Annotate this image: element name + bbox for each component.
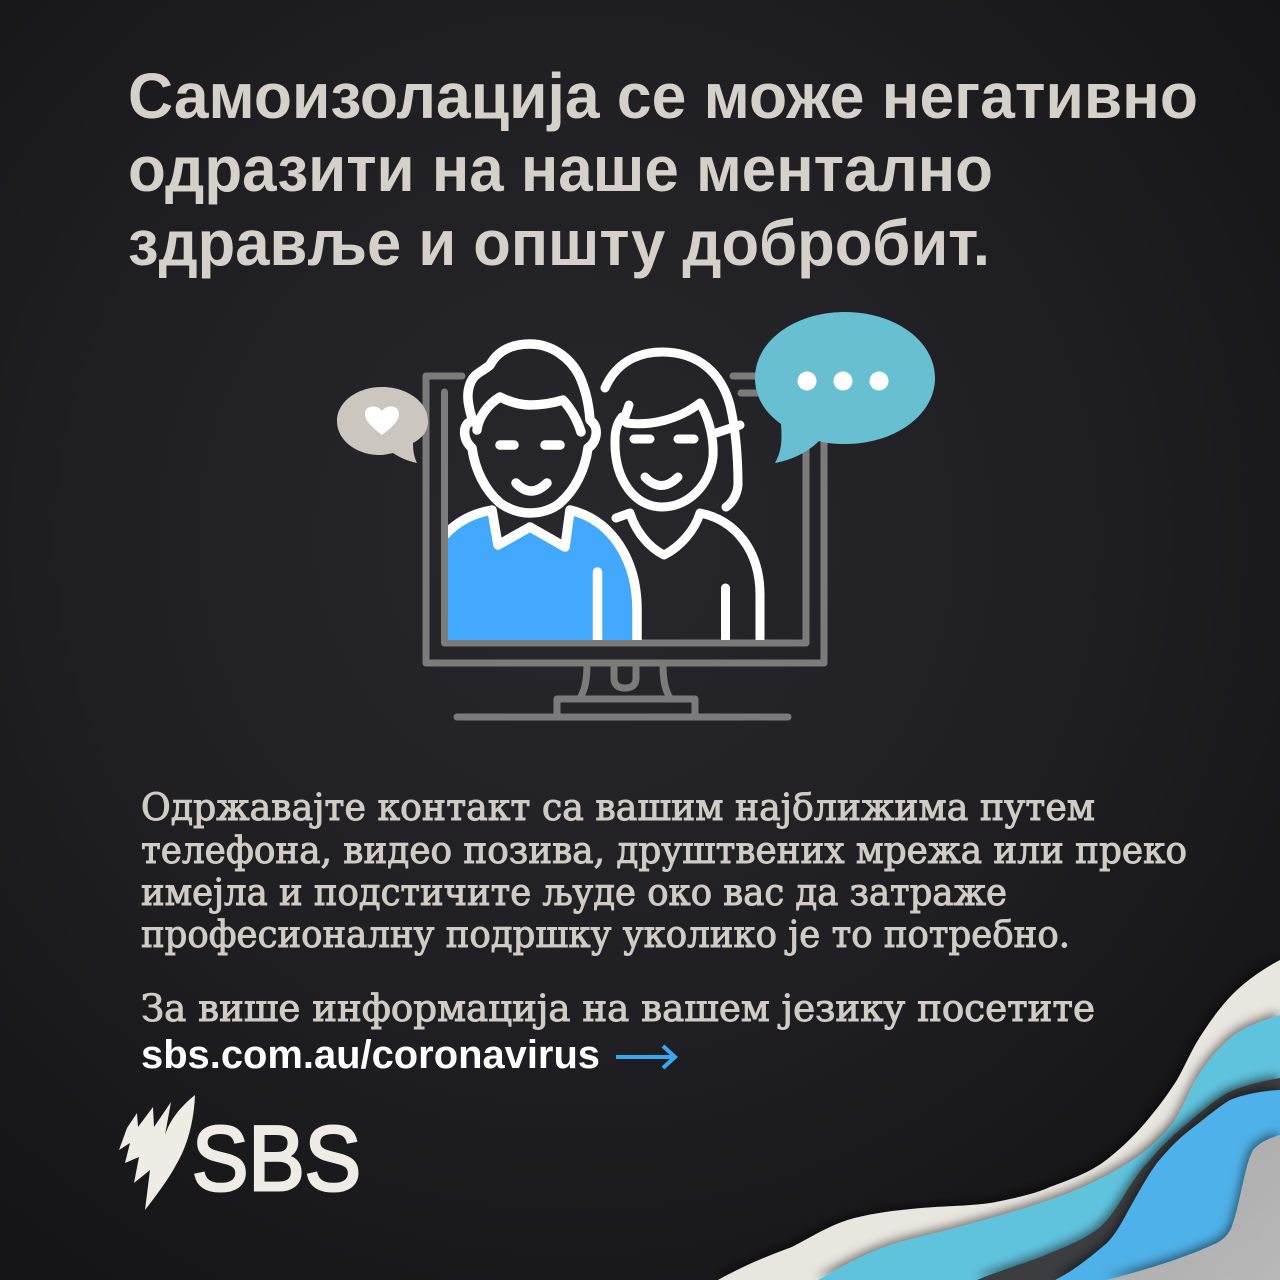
speech bubble: heart (337, 387, 428, 463)
icon: monitor (426, 376, 824, 717)
body text (141, 786, 1187, 956)
title: здравље и општу добробит. (128, 207, 990, 279)
url: sbs.com.au/coronavirus (141, 1033, 600, 1077)
body text: Одржавајте контакт са вашим најближима путем (141, 786, 1095, 829)
title: одразити на наше ментално (128, 133, 993, 205)
logo: SBS (119, 1095, 361, 1210)
arrow (616, 1046, 675, 1068)
body text: телефона, видео позива, друштвених мрежа или преко (141, 829, 1187, 872)
call to action text: За више информација на вашем језику посетите (141, 987, 1095, 1030)
illustration: people on a computer monitor (337, 312, 935, 717)
logo: SBS: SBS (192, 1108, 361, 1210)
title: Самоизолација се може негативно (128, 60, 1198, 132)
person: woman (605, 352, 760, 650)
decorative paper waves (718, 960, 1280, 1280)
speech bubble: dots (755, 312, 935, 463)
icon: SBS mercury (119, 1095, 195, 1210)
body text: професионалну подршку уколико је то потребно. (141, 913, 1070, 956)
person: man (444, 344, 637, 650)
title (128, 60, 1198, 279)
body text: имејла и подстичите људе око вас да затраже (141, 871, 1007, 914)
icon: heart (365, 406, 399, 435)
